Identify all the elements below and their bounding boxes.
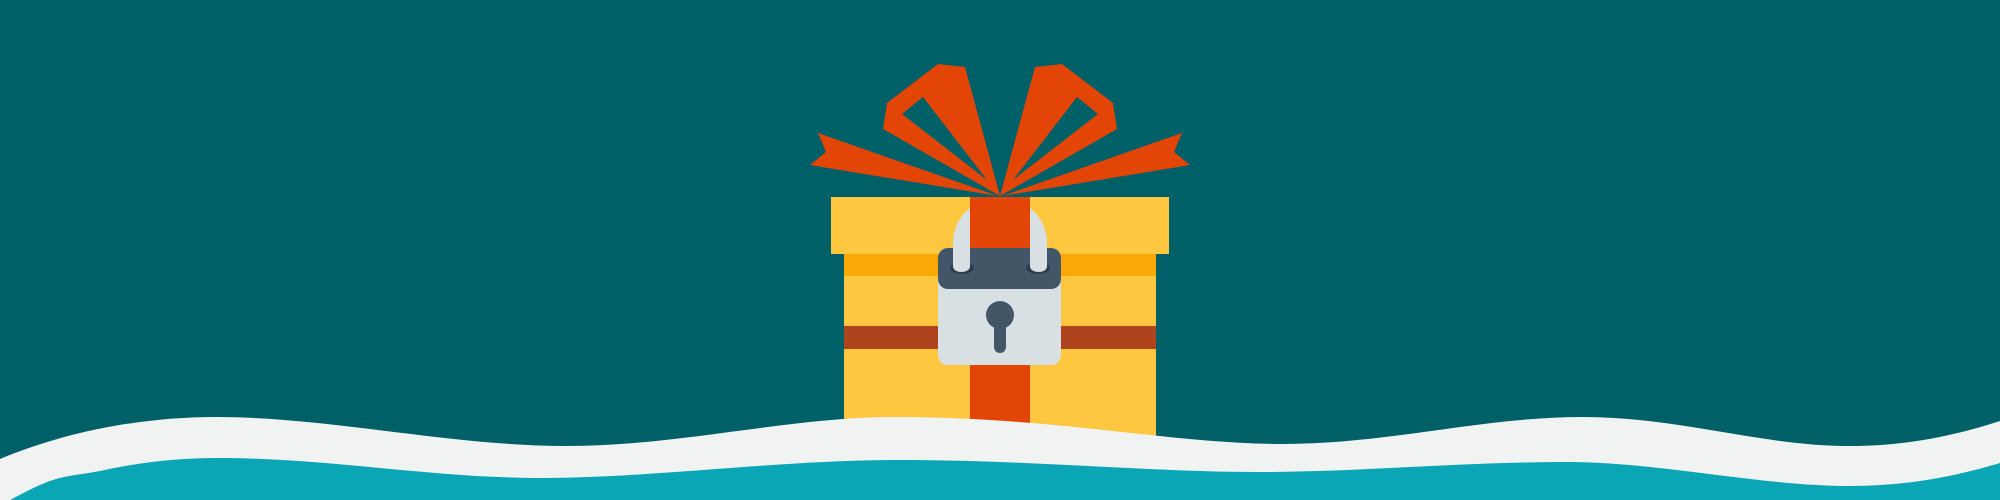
lock top plate [938,248,1061,289]
left shackle arm [953,208,970,272]
lid shadow band [844,254,1156,276]
right shackle arm [1030,208,1047,272]
icon: gift bow [810,64,1190,196]
white wave [0,417,2000,500]
keyhole [986,301,1014,353]
horizontal ribbon [844,326,1156,349]
left ribbon tail [810,133,998,196]
box lid [831,197,1169,254]
icon: gift box [831,197,1169,457]
box body [844,254,1156,454]
lock body [938,248,1061,365]
left bow loop [883,64,1000,196]
right bow loop [1000,64,1117,196]
teal wave [10,458,2000,500]
right shackle hole [1026,262,1050,274]
left shackle hole [950,262,974,274]
vertical ribbon [970,197,1030,457]
icon: padlock [938,208,1061,365]
right ribbon tail [1002,133,1190,196]
